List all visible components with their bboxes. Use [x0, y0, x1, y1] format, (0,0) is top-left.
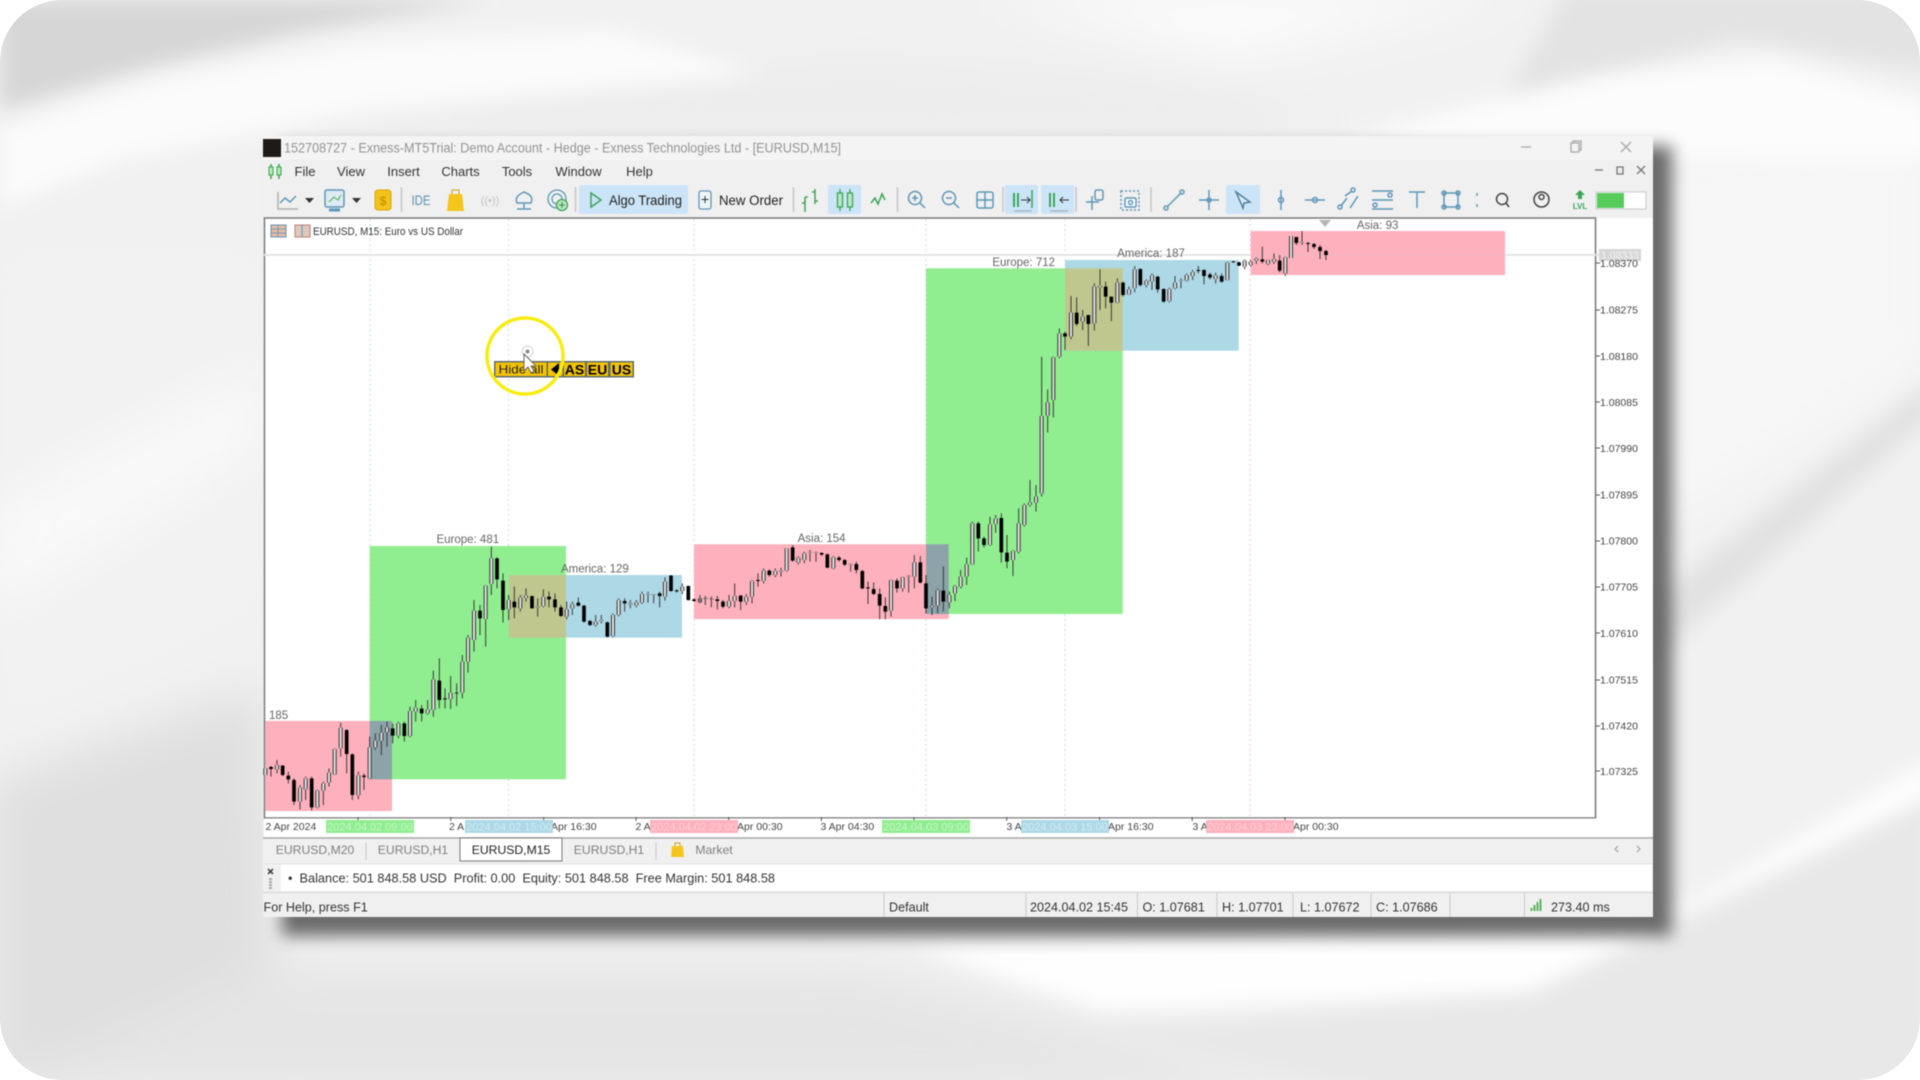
level progress bar	[1596, 192, 1646, 209]
price axis: 1.07325	[1600, 766, 1638, 778]
session box: Asia 185	[266, 710, 392, 811]
time axis: 2 A	[636, 821, 651, 833]
status bar: 2024.04.02 15:45	[1030, 900, 1128, 914]
menu bar: Charts	[441, 164, 480, 179]
price axis: 1.08180	[1600, 351, 1638, 363]
icon: signal: ((•))	[481, 195, 499, 207]
menu bar: Insert	[387, 164, 420, 179]
icon: grid	[977, 192, 993, 208]
menu bar: Window	[555, 164, 602, 179]
time axis: 3 A	[1006, 821, 1022, 833]
icon: search	[1496, 194, 1509, 207]
session time tag: 2024.04.02 23:00: 2024.04.02 23:00	[651, 822, 737, 834]
status bar: O: 1.07681	[1142, 900, 1205, 914]
chart tabs: EURUSD,H1	[574, 843, 644, 857]
chart symbol header	[271, 225, 463, 238]
tab scroll arrows	[1615, 846, 1640, 852]
price axis: 1.08275	[1600, 304, 1638, 316]
toolbar	[278, 185, 1646, 214]
menu bar: View	[337, 164, 366, 179]
price axis: 1.07420	[1600, 720, 1638, 732]
session time tag: 2024.04.02 09:00: 2024.04.02 09:00	[327, 822, 413, 834]
chart tabs: EURUSD,M20	[276, 843, 354, 857]
time axis: 2 Apr 2024	[266, 821, 316, 833]
status bar: 273.40 ms	[1551, 900, 1610, 914]
session box: Europe 712: Europe: 712	[992, 257, 1055, 269]
mouse pointer	[524, 354, 536, 373]
active tab: EURUSD,M15	[472, 843, 550, 857]
candlesticks	[265, 231, 1326, 811]
new order button: New Order	[719, 193, 783, 208]
icon: screenshot	[1121, 191, 1139, 210]
button: Hide all: Hide all	[498, 362, 544, 376]
chart tabs	[263, 838, 1653, 863]
window controls	[1521, 141, 1645, 174]
icon: globe add	[548, 190, 568, 210]
menu bar: File	[295, 164, 315, 179]
price axis: 1.07610	[1600, 628, 1638, 640]
session box: Asia 93	[1251, 220, 1505, 275]
icon: candle chart mode	[838, 189, 852, 211]
algo trading button: Algo Trading	[609, 193, 682, 208]
toolbar highlighted buttons	[579, 185, 1260, 214]
price axis: 1.07895	[1600, 490, 1638, 502]
session box: Europe 481: Europe: 481	[436, 534, 499, 546]
candles 2 Apr	[265, 547, 712, 811]
session time tag: 2024.04.03 15:00: 2024.04.03 15:00	[1022, 822, 1108, 834]
chart panel	[264, 218, 1653, 838]
time axis: 3 Apr 04:30	[820, 821, 874, 833]
time axis: Apr 00:30	[1293, 821, 1339, 833]
market tab	[671, 843, 733, 857]
icons: drawing tools	[1164, 188, 1477, 210]
chart tabs: EURUSD,H1	[378, 843, 448, 857]
price axis: 1.07705	[1600, 582, 1638, 594]
time axis: Apr 16:30	[1108, 821, 1154, 833]
session box: America 129	[509, 564, 682, 638]
app icon	[263, 139, 281, 157]
candles 2 to 3 Apr night	[700, 508, 1019, 619]
session time tag: 2024.04.03 09:00: 2024.04.03 09:00	[883, 822, 969, 834]
icon: line chart	[278, 192, 314, 209]
icon: dollar coin	[375, 190, 391, 210]
session time tag: 2024.04.02 15:00: 2024.04.02 15:00	[466, 822, 552, 834]
icon: level	[1573, 190, 1587, 211]
price axis: 1.07990	[1600, 443, 1638, 455]
icon: monitor chart	[325, 190, 361, 210]
market tab: Market	[695, 843, 733, 857]
status bar: C: 1.07686	[1376, 900, 1438, 914]
title bar	[263, 139, 1645, 174]
menu bar: Tools	[502, 164, 533, 179]
candles 3 Apr	[1059, 231, 1326, 358]
session box: America 187	[1065, 248, 1239, 351]
icon: add indicator	[1086, 190, 1103, 210]
time axis: Apr 00:30	[737, 821, 783, 833]
time axis: 3 A	[1192, 821, 1208, 833]
status bar: L: 1.07672	[1300, 900, 1360, 914]
session box: America 129: America: 129	[561, 564, 629, 576]
new order button	[699, 191, 783, 209]
time axis: Apr 16:30	[551, 821, 597, 833]
price axis: 1.07800	[1600, 536, 1638, 548]
status bar: H: 1.07701	[1222, 900, 1284, 914]
connection signal	[1532, 899, 1540, 911]
status bar: Default	[889, 900, 929, 914]
menu bar	[269, 164, 653, 179]
session box: Europe 712	[926, 257, 1123, 619]
toolbox close and grip	[268, 869, 273, 889]
price axis: 1.07515	[1600, 674, 1638, 686]
status bar: For Help, press F1	[264, 900, 368, 914]
session time tag: 2024.04.03 23:00: 2024.04.03 23:00	[1207, 822, 1293, 834]
active tab	[460, 838, 562, 861]
current price line over sessions	[1251, 254, 1505, 256]
button: EU: EU	[588, 362, 607, 378]
menu icon	[271, 164, 279, 179]
icon: bar chart mode	[802, 189, 818, 212]
button: US: US	[612, 362, 631, 378]
icon: dollar coin: $	[380, 194, 387, 208]
click indicator	[522, 346, 533, 357]
window drop shadow	[282, 146, 1672, 936]
window title: 152708727 - Exness-MT5Trial: Demo Account - Hedge - Exness Technologies Ltd - [EURUSD,M15]	[284, 140, 841, 156]
session box: Asia 154: Asia: 154	[798, 533, 846, 545]
button: collapse	[548, 362, 562, 376]
session box: Asia 154	[694, 533, 949, 619]
price axis	[1596, 249, 1641, 778]
cursor highlight circle	[487, 318, 563, 394]
chart shift marker	[1319, 220, 1331, 227]
price axis: 1.08085	[1600, 397, 1638, 409]
time axis: 2 A	[449, 821, 464, 833]
session vertical lines	[370, 219, 1250, 817]
account balance text: • Balance: 501 848.58 USD Profit: 0.00 Equity: 501 848.58 Free Margin: 501 848.58	[288, 870, 775, 886]
icon: level: LVL	[1573, 202, 1587, 211]
session toggle panel	[494, 361, 634, 378]
candles steep rally	[1024, 357, 1053, 527]
session box: America 187: America: 187	[1117, 248, 1185, 260]
current price tag: 1.08333	[1601, 250, 1639, 262]
button: AS: AS	[565, 362, 584, 378]
session box: Europe 481	[370, 534, 566, 779]
menu bar: Help	[626, 164, 653, 179]
trading platform window	[263, 136, 1653, 917]
icon: cloud	[516, 192, 532, 209]
icon: market bag	[447, 190, 464, 211]
icons: zoom in and out	[908, 192, 959, 208]
chart symbol header: EURUSD, M15: Euro vs US Dollar	[313, 226, 463, 238]
icon: line chart mode	[871, 194, 885, 204]
price axis: 1.08370	[1600, 258, 1638, 270]
window chrome	[263, 136, 1653, 917]
icon: account	[1534, 192, 1549, 207]
current price line	[264, 254, 1640, 256]
icons: chart shift and autoscroll	[1014, 190, 1069, 211]
session box: Asia 185: 185	[269, 710, 288, 722]
session box: Asia 93: Asia: 93	[1357, 220, 1398, 232]
icon: IDE: IDE	[412, 192, 430, 208]
toolbox account line	[263, 864, 1653, 891]
status bar	[263, 892, 1653, 917]
time axis	[266, 817, 1339, 834]
